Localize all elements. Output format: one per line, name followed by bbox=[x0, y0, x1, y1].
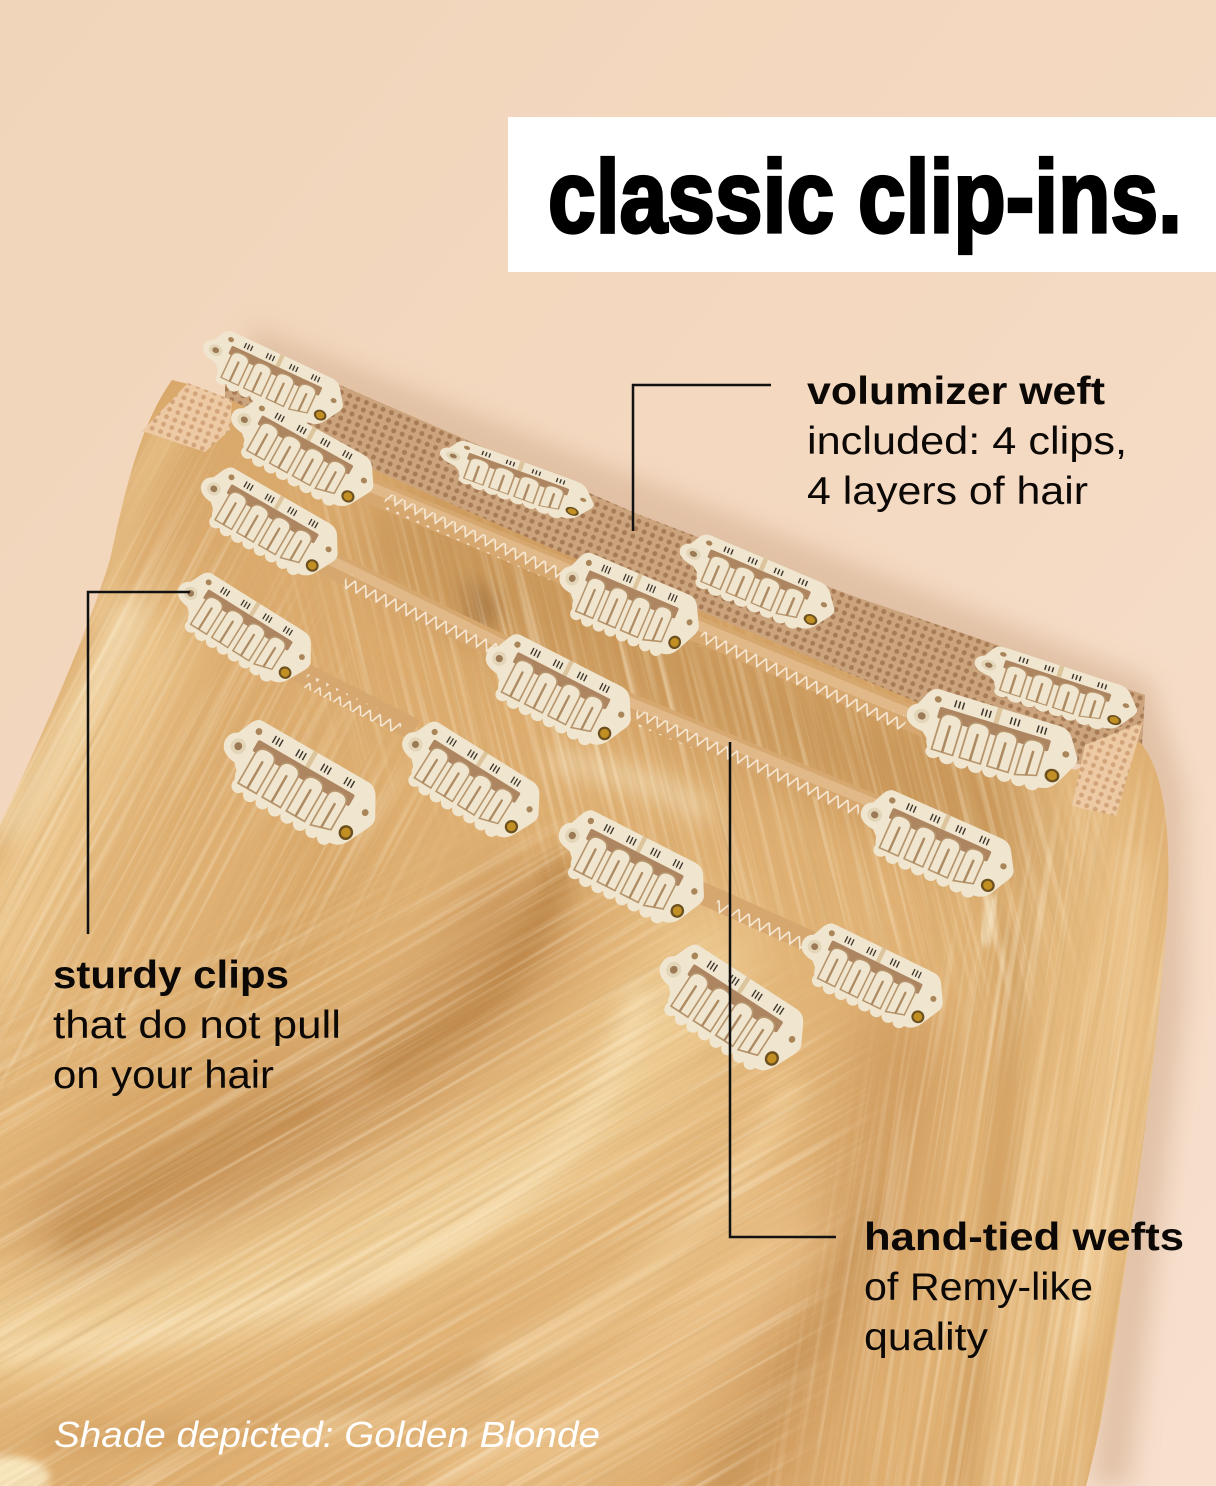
callout: hand-tied wefts: hand-tied wefts bbox=[864, 1216, 1184, 1259]
clips bbox=[161, 323, 1143, 1087]
callout: volumizer weft: 4 layers of hair bbox=[807, 470, 1088, 513]
clip: single left bbox=[204, 710, 390, 862]
callout: hand-tied wefts: quality bbox=[864, 1316, 989, 1359]
callout: sturdy clips: that do not pull bbox=[53, 1004, 341, 1047]
clip: weft three middle bbox=[384, 711, 552, 853]
callout: volumizer weft: volumizer weft bbox=[807, 370, 1105, 413]
wefts with stitching bbox=[285, 470, 925, 948]
fine strand texture: right side bbox=[679, 659, 681, 661]
volumizer mesh weft bbox=[225, 345, 1145, 780]
clip: weft one left bbox=[216, 389, 385, 521]
callout: volumizer weft bbox=[633, 370, 1127, 531]
callout: sturdy clips: sturdy clips bbox=[53, 954, 289, 997]
clip: volumizer 2 bbox=[432, 434, 599, 529]
callout: hand-tied wefts: of Remy-like bbox=[864, 1266, 1093, 1309]
tone masses bbox=[0, 430, 1133, 1486]
clip: weft three far right bbox=[787, 915, 954, 1042]
fine strand texture: upper layers bbox=[646, 725, 648, 727]
callout: hand-tied wefts bbox=[730, 742, 1184, 1359]
fine strand texture: left side bbox=[519, 816, 522, 819]
clip: weft one right bbox=[896, 682, 1085, 801]
callout: volumizer weft: included: 4 clips, bbox=[807, 420, 1127, 463]
bright streak below clip bbox=[984, 895, 994, 945]
clip: weft two middle bbox=[469, 625, 643, 760]
clip: weft two left bbox=[185, 458, 350, 590]
clip: volumizer 3 bbox=[669, 526, 843, 641]
mesh end tabs bbox=[142, 383, 1143, 816]
hair extension body bbox=[0, 380, 1168, 1486]
bright patch lower-left corner bbox=[0, 1456, 50, 1486]
clip: single bottom bbox=[638, 934, 817, 1087]
clip: weft one middle bbox=[545, 545, 709, 668]
clip: weft three right bbox=[542, 801, 716, 938]
callout: sturdy clips bbox=[53, 592, 341, 1097]
clip: volumizer 1 bbox=[191, 323, 352, 437]
clip: weft three left bbox=[161, 563, 323, 697]
clip: volumizer 4 bbox=[966, 640, 1143, 740]
shade caption: Shade depicted: Golden Blonde bbox=[54, 1414, 600, 1455]
clip: weft two right bbox=[846, 782, 1024, 911]
fine strand texture: lower sweep bbox=[470, 1119, 472, 1121]
soft shadow under the hair bbox=[250, 325, 1186, 1486]
callout: sturdy clips: on your hair bbox=[53, 1054, 274, 1097]
